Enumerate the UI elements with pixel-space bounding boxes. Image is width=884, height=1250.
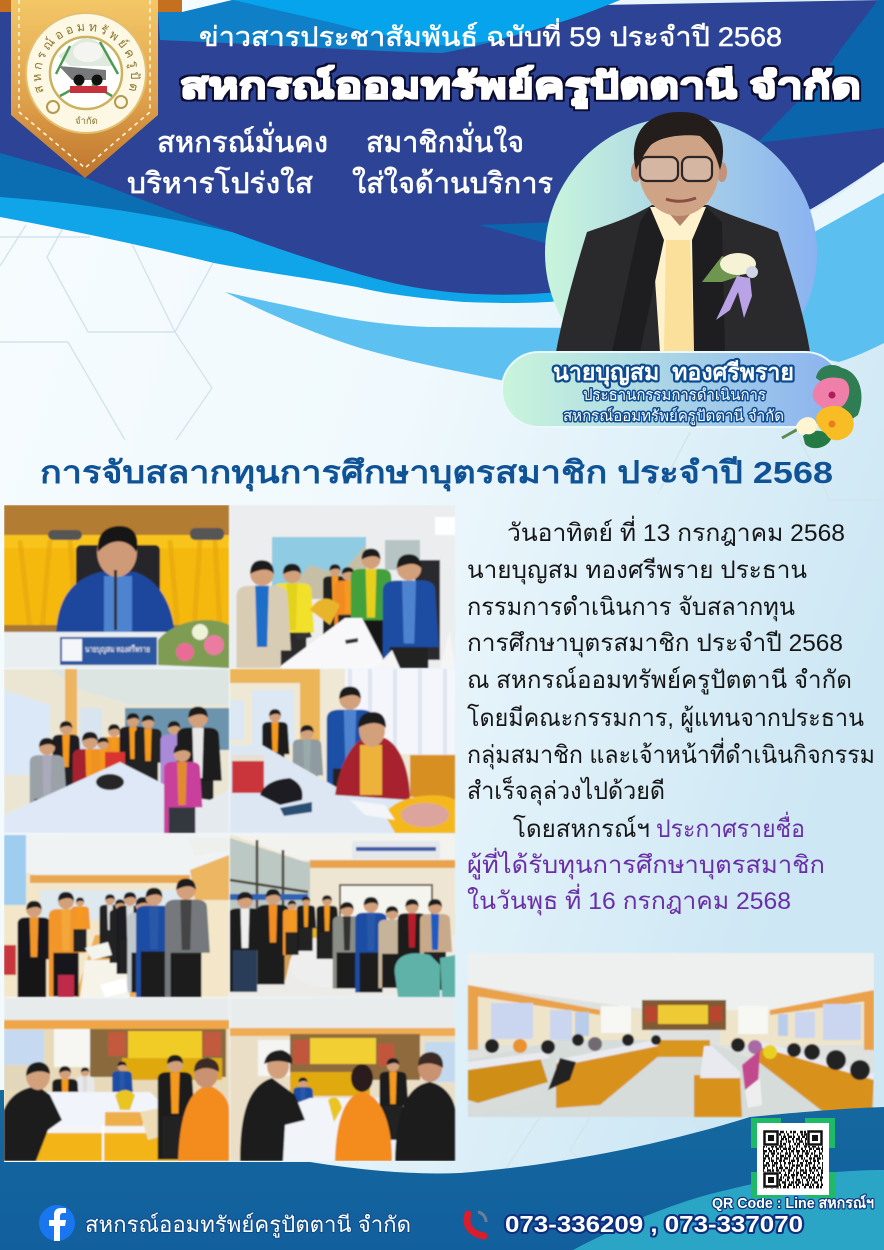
announcement highlight 1: ประกาศรายชื่อ — [656, 811, 805, 843]
background hexagon pattern — [0, 225, 884, 1170]
photo 7: drawing with chairman — [4, 996, 230, 1161]
icon: facebook — [39, 1205, 75, 1241]
paragraph line 1: วันอาทิตย์ ที่ 13 กรกฎาคม 2568 — [507, 515, 845, 547]
announcement lead-in: โดยสหกรณ์ฯ — [513, 815, 650, 843]
photo 8: counting slips — [228, 997, 456, 1161]
right white band — [790, 162, 884, 245]
photo 2: group at table with poster — [228, 505, 455, 669]
main heading: การจับสลากทุนการศึกษาบุตรสมาชิก ประจำปี 2568 — [40, 455, 833, 492]
icon: tropical flowers — [782, 365, 861, 448]
paragraph line 4: การศึกษาบุตรสมาชิก ประจำปี 2568 — [467, 630, 843, 658]
name plate pill — [502, 352, 842, 427]
slogan 1: สหกรณ์มั่นคง — [157, 122, 328, 159]
slogan 3: บริหารโปร่งใส — [127, 166, 313, 200]
header band: bright blue wave — [0, 140, 560, 303]
name plate — [502, 352, 842, 427]
footer teal wedge — [573, 1170, 884, 1250]
top right mid blue wedge — [757, 0, 884, 143]
announcement highlight 2: ผู้ที่ได้รับทุนการศึกษาบุตรสมาชิก — [467, 847, 825, 880]
photo 6: large group standing — [229, 832, 456, 998]
cooperative seal: จำกัด — [75, 116, 98, 127]
paragraph line 5: ณ สหกรณ์ออมทรัพย์ครูปัตตานี จำกัด — [467, 666, 852, 695]
cooperative name heading: สหกรณ์ออมทรัพย์ครูปัตตานี จำกัด — [180, 65, 861, 109]
slogans — [127, 122, 553, 200]
portrait: man in dark suit — [556, 112, 810, 352]
slogan 2: สมาชิกมั่นใจ — [366, 122, 524, 159]
footer band — [0, 1090, 884, 1250]
chairman name: นายบุญสม ทองศรีพราย — [553, 359, 794, 387]
body text — [467, 515, 875, 916]
header band: navy — [0, 0, 884, 295]
paragraph line 8: สำเร็จลุล่วงไปด้วยดี — [467, 775, 665, 806]
chairman role: ประธานกรรมการดำเนินการ — [583, 387, 766, 404]
photo 9: wide meeting room — [466, 952, 874, 1118]
header band: mid blue wave — [0, 140, 300, 232]
photo collage — [4, 505, 874, 1161]
cooperative seal — [25, 12, 147, 134]
paragraph line 3: กรรมการดำเนินการ จับสลากทุน — [467, 594, 795, 622]
photo 3: team around table — [4, 668, 230, 834]
small blue wedge beside portrait — [479, 222, 560, 247]
ribbon top bar — [0, 0, 182, 12]
announcement highlight 3: ในวันพุธ ที่ 16 กรกฎาคม 2568 — [467, 883, 791, 916]
photo 1: chairman at desk — [4, 505, 230, 669]
newsletter issue line: ข่าวสารประชาสัมพันธ์ ฉบับที่ 59 ประจำปี 2568 — [199, 18, 782, 52]
photo 4: seated with chairman — [229, 668, 456, 834]
phone numbers: 073-336209 , 073-337070 — [505, 1211, 803, 1237]
organisation name: สหกรณ์ออมทรัพย์ครูปัตตานี จำกัด — [563, 407, 784, 426]
photo 5: standing team at table — [4, 832, 230, 998]
top bright cyan — [233, 0, 620, 45]
portrait circle — [545, 117, 817, 389]
ribbon body — [11, 0, 158, 178]
icon: phone — [467, 1212, 486, 1236]
paragraph line 2: นายบุญสม ทองศรีพราย ประธาน — [467, 557, 807, 585]
ribbon badge — [0, 0, 182, 178]
photo 1: chairman at desk: นายบุญสม ทองศรีพราย — [85, 644, 150, 655]
QR code — [751, 1118, 835, 1198]
left sky blue wedge — [225, 292, 600, 395]
right sky blue band — [790, 193, 884, 362]
ribbon stitching — [19, 0, 150, 168]
QR caption: QR Code : Line สหกรณ์ฯ — [712, 1194, 874, 1212]
slogan 4: ใส่ใจด้านบริการ — [352, 166, 553, 200]
facebook page name: สหกรณ์ออมทรัพย์ครูปัตตานี จำกัด — [85, 1212, 411, 1238]
paragraph line 6: โดยมีคณะกรรมการ, ผู้แทนจากประธาน — [467, 704, 864, 733]
top cyan shape — [158, 0, 620, 53]
